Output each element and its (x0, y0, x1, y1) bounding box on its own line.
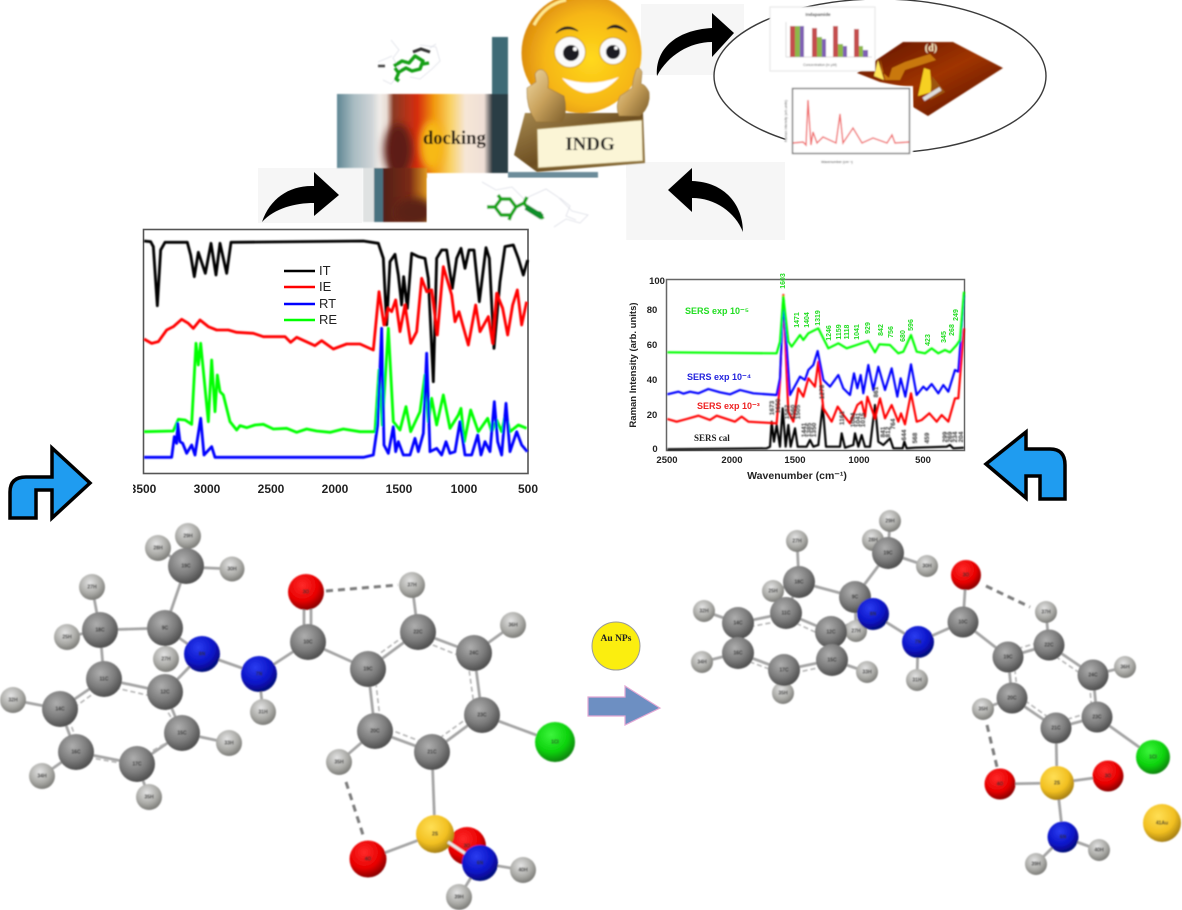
atoms: 25H (768, 588, 778, 594)
reaction arrow (588, 686, 660, 725)
atoms: 35H (144, 794, 154, 800)
applications ellipse (714, 0, 1046, 164)
black peak labels: 1650 (775, 398, 782, 413)
atoms: 33H (862, 669, 872, 675)
atoms: 34H (37, 773, 47, 779)
black peak labels: 1278 (819, 384, 826, 399)
black peak labels: 234 (952, 431, 959, 442)
atoms: 33H (224, 740, 234, 746)
x axis labels: 2000 (322, 482, 349, 496)
black peak labels: 1582 (784, 404, 791, 419)
chart legend: RT (319, 296, 336, 311)
bonds (13, 536, 555, 897)
left molecule: free INDG (0, 523, 575, 910)
bar chart panel: Indapamide (770, 7, 875, 71)
axis tick labels: 500 (915, 455, 931, 466)
hydrogen bonds (326, 585, 398, 838)
black peak labels: 1560 (790, 404, 797, 419)
green peak labels: 1041 (854, 324, 861, 340)
atoms: 30H (922, 563, 932, 569)
chart legend (284, 263, 337, 327)
blue arrow: molecule to IR chart (10, 448, 90, 518)
atoms: 11C (100, 676, 109, 682)
series labels: SERS exp 10⁻⁴ (687, 372, 751, 382)
chart legend: IT (319, 263, 331, 278)
series labels: SERS exp 10⁻⁵ (685, 306, 749, 316)
right eye (600, 38, 626, 64)
atoms: 37H (1041, 609, 1051, 615)
black peak labels: 1350 (811, 422, 818, 437)
atoms: 20C (370, 728, 380, 734)
atoms: 39H (1031, 861, 1041, 867)
black peak labels: 1673 (769, 400, 776, 415)
atoms: 19C (883, 550, 893, 556)
atoms: 12C (160, 689, 170, 695)
atoms: 14C (733, 620, 743, 626)
axis tick labels: 0 (652, 444, 658, 455)
atoms: 25H (62, 634, 72, 640)
atoms: 7N (256, 671, 263, 677)
series labels: SERS cal (694, 433, 730, 443)
atoms: 35H (778, 690, 788, 696)
smile (562, 77, 619, 93)
spectrum panel (784, 86, 913, 164)
x axis labels (130, 482, 538, 496)
bar chart panel: Indapamide: Concentration (in μM) (803, 63, 837, 67)
green peak labels: 268 (949, 324, 956, 336)
atoms: 2S (1054, 780, 1061, 786)
axis tick labels: 20 (647, 410, 657, 421)
left eye (554, 36, 586, 68)
arrow: spectra to docking (262, 172, 339, 222)
right molecule: INDG adsorbed on gold (691, 510, 1181, 875)
x axis labels: 500 (518, 482, 538, 496)
left thumb (527, 70, 566, 122)
atoms: 23C (1092, 714, 1102, 720)
atoms: 2S (432, 831, 439, 837)
INDG label: INDG (565, 134, 615, 155)
atoms: 28H (153, 545, 163, 551)
smiley face (522, 0, 642, 113)
atoms: 9C (852, 594, 859, 600)
atoms: 6N (477, 860, 484, 866)
atoms: 36H (508, 622, 518, 628)
axis tick labels: 80 (647, 305, 657, 316)
black peak labels: 269 (947, 431, 954, 442)
chart legend: IE (319, 279, 332, 294)
atoms: 36H (1120, 664, 1130, 670)
atoms: 16C (733, 650, 743, 656)
trophy base (514, 113, 645, 172)
atoms: 19C (1003, 654, 1013, 660)
green peak labels: 1319 (815, 310, 822, 326)
docking label: docking (423, 129, 486, 149)
lung image lower strip (508, 172, 598, 178)
atoms: 12C (826, 629, 836, 635)
atoms: 21C (427, 749, 437, 755)
atoms: 16C (71, 749, 81, 755)
black peak labels: 1441 (801, 422, 808, 437)
atoms: 22C (413, 629, 423, 635)
atoms: 4O (365, 856, 371, 862)
atoms: 27H (161, 656, 171, 662)
series labels: SERS exp 10⁻³ (697, 401, 760, 411)
green peak labels: 756 (888, 326, 895, 338)
green peak labels: 423 (925, 334, 932, 346)
IT curve (144, 241, 528, 382)
black peak labels: 841 (880, 426, 887, 437)
black peak labels: 459 (924, 432, 931, 443)
atoms: 3O (1105, 773, 1111, 779)
IR and Raman line chart (126, 230, 538, 496)
atoms (691, 510, 1181, 875)
gold atom (1143, 804, 1181, 842)
black peak labels: 1041 (855, 412, 862, 427)
atoms: 21C (1051, 725, 1061, 731)
green peak labels: 249 (953, 309, 960, 321)
atoms: 29H (183, 533, 193, 539)
atoms: 41Au (1156, 820, 1168, 826)
spectrum panel: Wavenumber (cm⁻¹) (821, 160, 853, 164)
axis tick labels: 60 (647, 340, 657, 351)
right thumb (617, 68, 649, 116)
atoms: 3O (464, 843, 470, 849)
atoms: 1Cl (551, 739, 560, 745)
black peak labels: 1015 (860, 412, 867, 427)
black peak labels: 1161 (839, 411, 846, 425)
green peak labels: 1471 (794, 312, 801, 328)
black peak labels: 1385 (806, 422, 813, 437)
green peak labels: 842 (878, 324, 885, 336)
white panel with docked ligand (upper) (378, 40, 440, 84)
green peak labels (780, 273, 960, 346)
atoms: 15C (177, 730, 187, 736)
atoms: 8N (870, 611, 877, 617)
green peak labels: 1246 (826, 325, 833, 341)
atoms: 1Cl (1149, 754, 1158, 760)
axis tick labels: 2000 (721, 455, 743, 466)
atoms: 14C (55, 706, 65, 712)
green peak labels: 1404 (804, 312, 811, 328)
atoms: 40H (518, 867, 528, 873)
SERS calculated curve (667, 405, 964, 449)
atoms: 39H (454, 894, 464, 900)
atoms: 31H (912, 677, 922, 683)
axis tick labels: 40 (647, 375, 657, 386)
black peak labels: 812 (885, 426, 892, 437)
green peak labels: 345 (941, 331, 948, 343)
green peak labels: 596 (908, 319, 915, 331)
black peak labels: 299 (942, 431, 949, 442)
atoms: 7N (915, 639, 922, 645)
atoms: 27H (87, 584, 97, 590)
white panel with docked ligand (lower) (427, 178, 626, 240)
atoms: 35H (334, 759, 344, 765)
atoms: 10C (303, 639, 313, 645)
y axis title: Raman Intensity (arb. units) (628, 302, 639, 428)
SERS exp 10^-5 curve (667, 292, 964, 353)
axis tick labels: 100 (649, 276, 665, 287)
atoms: 3O (963, 572, 969, 578)
atoms (0, 523, 575, 910)
black peak labels: 204 (958, 431, 965, 442)
RE curve (144, 328, 527, 442)
atoms: 8N (199, 651, 206, 657)
x axis labels: 1500 (386, 482, 413, 496)
hydrogen bonds (986, 586, 1030, 767)
arrow background patches (258, 4, 785, 240)
atoms: 28H (868, 537, 878, 543)
atoms: 32H (699, 608, 709, 614)
green peak labels: 1159 (836, 324, 843, 340)
atoms: 19C (363, 666, 373, 672)
AFM surface image: (d) (925, 43, 937, 54)
atoms: 35H (978, 706, 988, 712)
docking image: lung scan (337, 37, 598, 226)
trophy emoji with INDG plaque (514, 0, 649, 172)
atoms: 18C (794, 579, 804, 585)
green peak labels: 1603 (780, 273, 787, 289)
atoms: 19C (181, 563, 191, 569)
RT curve (144, 328, 527, 457)
atoms: 9C (162, 625, 169, 631)
x axis labels: 3500 (130, 482, 157, 496)
axis tick labels: 1000 (848, 455, 870, 466)
SERS exp 10^-4 curve (667, 295, 964, 397)
gold nanoparticle: Au NPs (592, 622, 640, 670)
bonds (702, 521, 1153, 864)
black peak labels: 644 (901, 429, 908, 440)
atoms: 30H (227, 566, 237, 572)
atoms: 22C (1044, 642, 1054, 648)
black peak labels (769, 384, 965, 443)
atoms: 37H (407, 582, 417, 588)
atoms: 27H (792, 538, 802, 544)
x axis labels: 1000 (451, 482, 478, 496)
SERS exp 10^-3 curve (667, 295, 964, 424)
atoms: 17C (132, 761, 142, 767)
axis tick labels: 2500 (656, 455, 678, 466)
axis tick labels (647, 276, 931, 466)
atoms: 3O (303, 589, 309, 595)
green peak labels: 929 (865, 322, 872, 334)
series labels (685, 306, 760, 443)
atoms: 31H (258, 709, 268, 715)
x axis labels: 2500 (258, 482, 285, 496)
atoms: 20C (1007, 695, 1017, 701)
x axis title: Wavenumber (cm⁻¹) (747, 470, 847, 482)
atoms: 6N (1060, 834, 1067, 840)
atoms: 11C (782, 610, 791, 616)
SERS Raman chart (628, 273, 965, 482)
atoms: 32H (8, 697, 18, 703)
spectrum panel: Raman Intensity (arb.units) (784, 100, 788, 142)
chart legend: RE (319, 312, 337, 327)
green peak labels: 680 (900, 330, 907, 342)
AFM surface image (857, 42, 1003, 116)
eyebrows (556, 25, 627, 33)
atoms: 4O (997, 781, 1003, 787)
atoms: 15C (827, 657, 837, 663)
black peak labels: 1084 (850, 412, 857, 427)
arrow: SERS to docking (668, 168, 743, 232)
plaque (537, 120, 643, 168)
black peak labels: 861 (873, 386, 880, 397)
atoms: 24C (1088, 672, 1098, 678)
blue arrow: molecule to SERS chart (986, 432, 1065, 499)
atoms: 40H (1094, 847, 1104, 853)
black peak labels: 568 (912, 432, 919, 443)
atoms: 24C (469, 650, 479, 656)
arrow: trophy to applications (657, 13, 734, 76)
atoms: 17C (779, 667, 789, 673)
atoms: 27H (851, 628, 861, 634)
atoms: 34H (697, 659, 707, 665)
atoms: 29H (885, 518, 895, 524)
atoms: 18C (95, 627, 105, 633)
black peak labels: 1505 (795, 404, 802, 419)
gold nanoparticle: Au NPs: Au NPs (601, 634, 632, 644)
axis tick labels: 1500 (784, 455, 806, 466)
green peak labels: 1118 (844, 324, 851, 339)
atoms: 23C (477, 712, 487, 718)
x axis labels: 3000 (194, 482, 221, 496)
black peak labels: 764 (890, 418, 897, 429)
atoms: 10C (958, 619, 968, 625)
IE curve (144, 267, 527, 350)
bar chart panel: Indapamide: Indapamide (805, 12, 831, 17)
